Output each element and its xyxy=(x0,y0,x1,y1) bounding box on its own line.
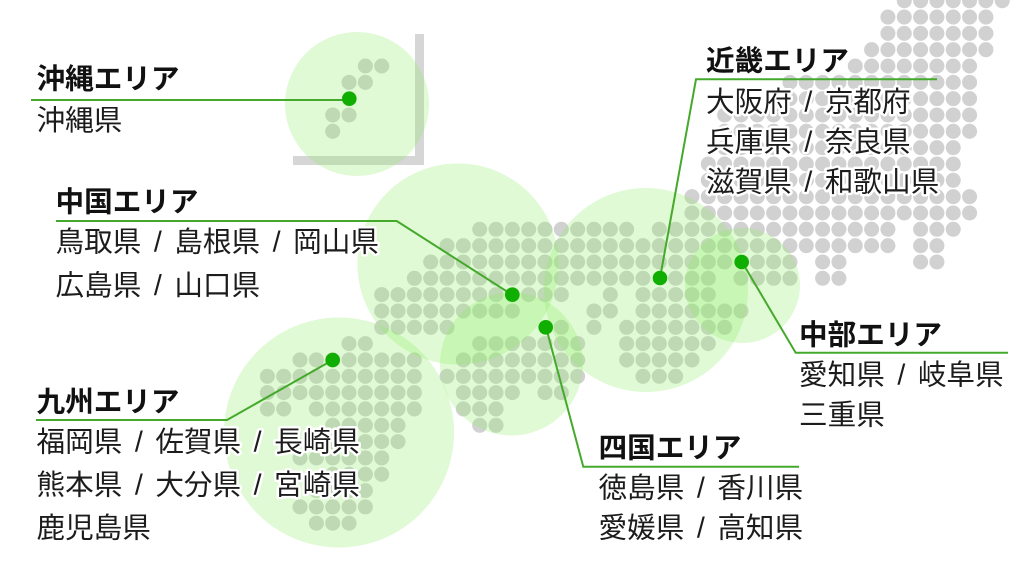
marker: Chugoku xyxy=(505,287,520,302)
circle: Okinawa xyxy=(285,32,429,176)
text: Chugoku prefectures: 広島県 / 山口県 xyxy=(56,270,260,302)
dot grid map of Japan xyxy=(267,1,1002,523)
text: Kyushu prefectures: 熊本県 / 大分県 / 宮崎県 xyxy=(36,470,360,502)
heading: Okinawa area: 沖縄エリア xyxy=(36,64,179,96)
marker: Chubu xyxy=(734,255,749,269)
text: Kinki prefectures: 滋賀県 / 和歌山県 xyxy=(706,166,939,198)
Okinawa dots xyxy=(333,66,382,131)
marker: Kyushu xyxy=(325,353,340,367)
label: Chugoku xyxy=(56,186,379,302)
text: Kyushu prefectures: 福岡県 / 佐賀県 / 長崎県 xyxy=(36,426,360,458)
heading: Kyushu area: 九州エリア xyxy=(36,386,179,418)
label: Kansai xyxy=(706,46,939,198)
marker: Kansai xyxy=(653,271,667,285)
circle: Chubu xyxy=(685,228,800,343)
heading: Chugoku area: 中国エリア xyxy=(56,186,198,218)
text: Kyushu prefectures xyxy=(36,426,360,544)
label: Chubu xyxy=(799,320,1004,432)
heading: Shikoku area: 四国エリア xyxy=(598,432,741,464)
label: Kyushu xyxy=(36,386,360,544)
text: Shikoku prefectures: 徳島県 / 香川県 xyxy=(598,472,803,504)
heading: Kinki area: 近畿エリア xyxy=(706,46,849,78)
text: Chubu prefectures: 愛知県 / 岐阜県 xyxy=(799,360,1004,392)
highlighted region circles xyxy=(224,32,800,548)
marker: Okinawa xyxy=(342,91,357,106)
text: Kinki prefectures: 兵庫県 / 奈良県 xyxy=(706,126,911,158)
label: Shikoku xyxy=(598,432,803,544)
circle: Kyushu xyxy=(224,318,454,548)
leader: Chugoku xyxy=(56,221,512,295)
text: Chugoku prefectures: 鳥取県 / 島根県 / 岡山県 xyxy=(56,226,379,258)
text: Shikoku prefectures xyxy=(598,472,803,544)
text: Kyushu prefectures: 鹿児島県 xyxy=(36,512,151,544)
circle: Kansai xyxy=(544,188,748,392)
leader: Kyushu xyxy=(36,360,333,420)
leader: Shikoku xyxy=(546,327,799,467)
location markers xyxy=(325,91,749,367)
leader: Chubu xyxy=(742,262,1008,353)
text: Shikoku prefectures: 愛媛県 / 高知県 xyxy=(598,512,803,544)
text: Chubu prefectures: 三重県 xyxy=(799,400,885,432)
marker: Shikoku xyxy=(538,320,553,335)
inset frame for Okinawa xyxy=(293,34,420,160)
text: Chubu prefectures xyxy=(799,360,1004,432)
leader lines xyxy=(31,79,1008,467)
circle: Shikoku xyxy=(440,292,583,436)
text: Okinawa prefectures: 沖縄県 xyxy=(36,105,122,137)
circle: Chugoku xyxy=(358,164,558,364)
text: Chugoku prefectures xyxy=(56,226,379,302)
label: Okinawa xyxy=(36,64,179,137)
heading: Chubu area: 中部エリア xyxy=(799,320,942,352)
text: Kinki prefectures: 大阪府 / 京都府 xyxy=(706,86,911,118)
leader: Kansai xyxy=(660,79,937,278)
text: Kinki prefectures xyxy=(706,86,939,198)
leader: Okinawa xyxy=(31,99,349,101)
